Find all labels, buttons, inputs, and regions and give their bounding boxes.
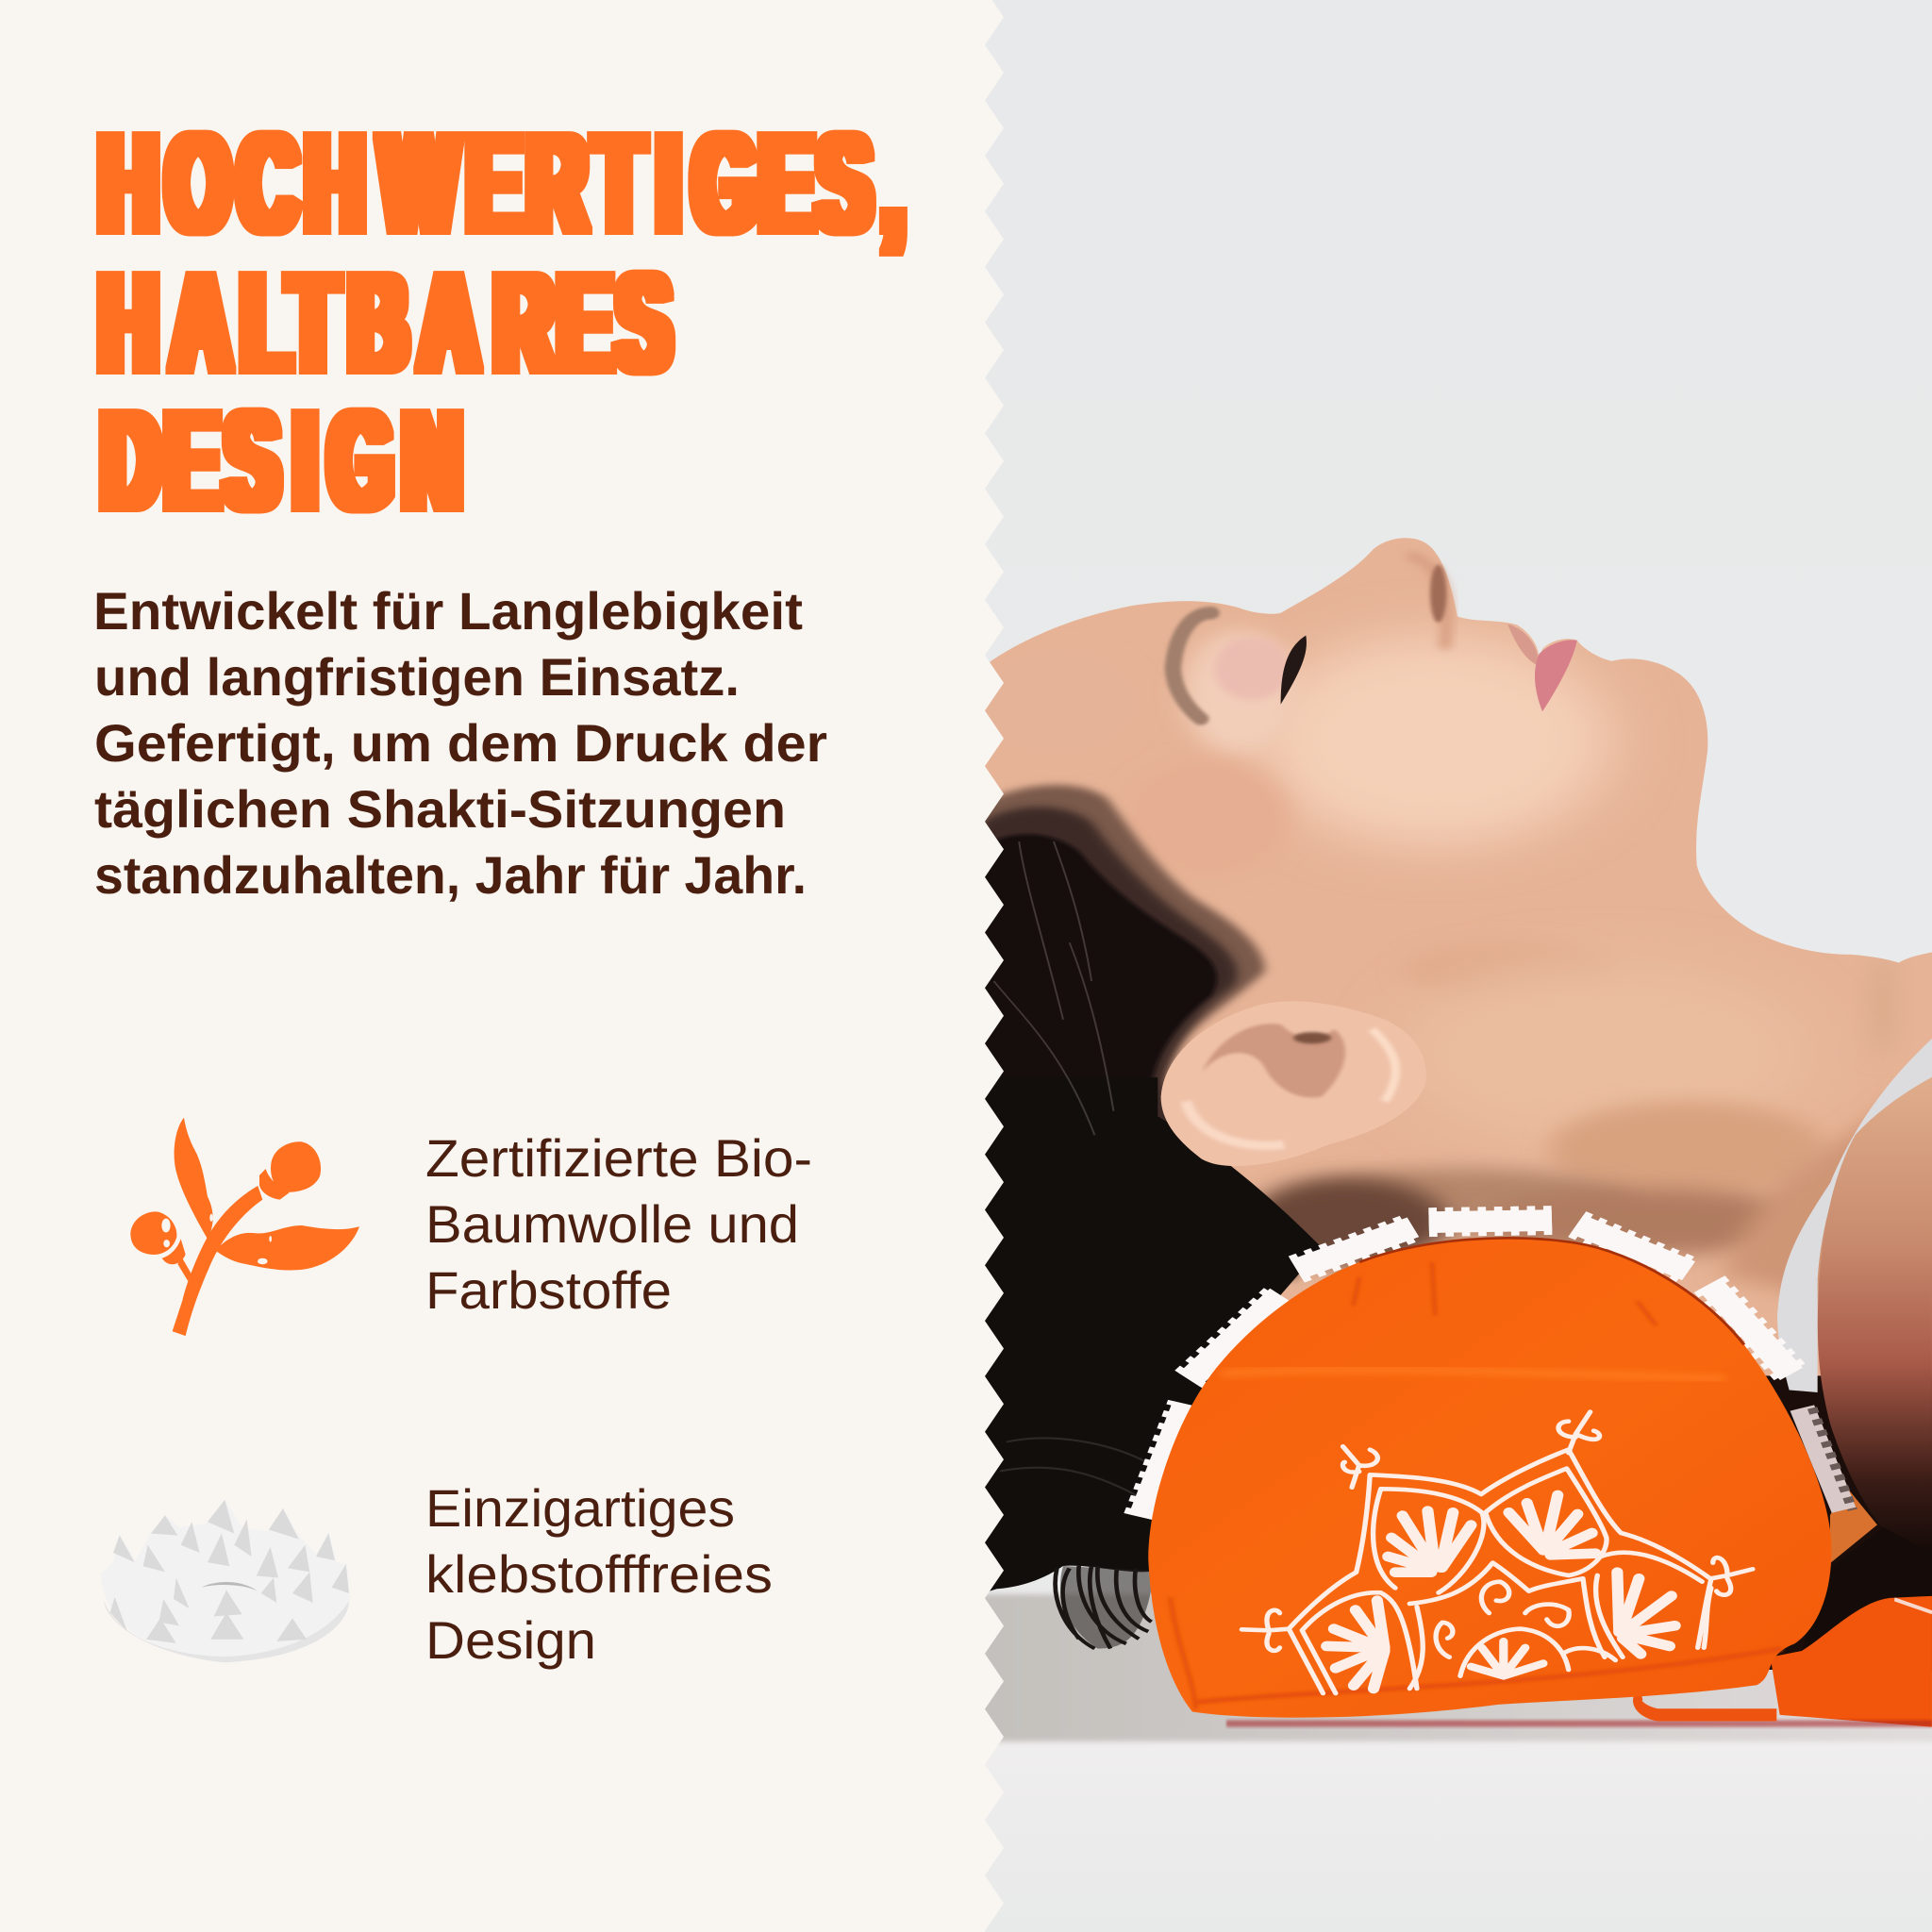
eyelashes (1281, 636, 1307, 705)
shoulder, strap and arm (1777, 1039, 1932, 1562)
icon: white spiked acupressure disc (101, 1499, 350, 1662)
lower lip (1535, 640, 1577, 711)
text: organic cotton (425, 1128, 812, 1320)
intro paragraph: Gefertigt, um dem Druck der (94, 713, 827, 773)
intro paragraph (93, 581, 827, 905)
text: organic cotton: Baumwolle und (425, 1194, 799, 1254)
fan petals (1326, 1495, 1675, 1689)
photo: woman on acupressure pillow (934, 0, 1932, 1932)
white mandala print (1241, 1412, 1753, 1693)
floor (943, 1734, 1932, 1932)
heading: DESIGN (102, 382, 461, 539)
heading: HALTBARES (99, 244, 671, 401)
acupressure spike strips (1142, 1221, 1853, 1517)
hair upper (981, 785, 1296, 1284)
icon: orange botanical sprig (130, 1118, 359, 1336)
text: adhesive-free design (425, 1478, 773, 1670)
hair lower (981, 1077, 1322, 1649)
dark area under the arm (1766, 1375, 1932, 1670)
text: adhesive-free design: Einzigartiges (425, 1478, 735, 1538)
intro paragraph: Entwickelt für Langlebigkeit (93, 581, 803, 641)
intro paragraph: täglichen Shakti-Sitzungen (94, 779, 786, 839)
skin: face and neck (974, 538, 1932, 1375)
nose shadow and nostril (1407, 555, 1446, 649)
heading: HOCHWERTIGES, (99, 105, 905, 261)
intro paragraph: standzuhalten, Jahr für Jahr. (94, 845, 807, 905)
text: adhesive-free design: klebstofffreies (425, 1544, 773, 1604)
mandala outlines (1289, 1450, 1711, 1693)
central half flower (1471, 1641, 1543, 1676)
ear (1161, 1001, 1426, 1166)
orange half-round pillow (1148, 1238, 1831, 1718)
side mat with cord (1226, 1596, 1932, 1727)
floor shadow behind hair (934, 1594, 1932, 1741)
intro paragraph: und langfristigen Einsatz. (94, 647, 740, 707)
eyebrow (1173, 613, 1211, 719)
hair strands (993, 841, 1113, 1135)
closed eyelid (1215, 640, 1285, 700)
text: organic cotton: Farbstoffe (425, 1260, 672, 1320)
spirals (1481, 1582, 1509, 1613)
text: adhesive-free design: Design (425, 1610, 596, 1670)
upper lip (1507, 624, 1540, 666)
left panel with zigzag edge (0, 0, 1004, 1932)
corner ornaments (1342, 1446, 1377, 1488)
text: organic cotton: Zertifizierte Bio- (425, 1128, 812, 1188)
heading (99, 105, 905, 539)
